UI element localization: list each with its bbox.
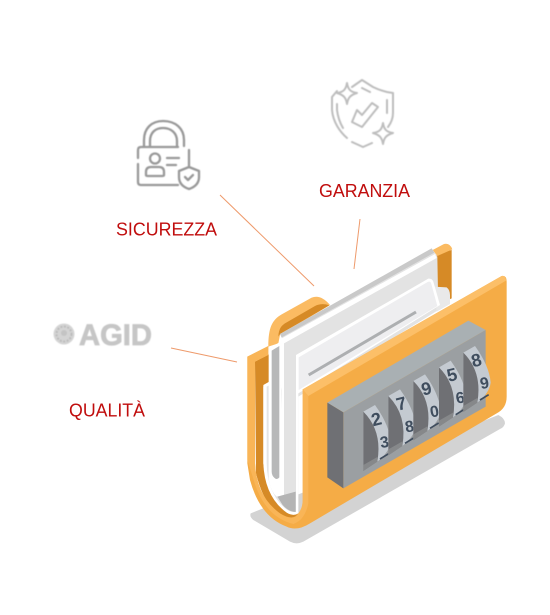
- icon: padlock with id card and shield: [138, 121, 199, 189]
- heading: GARANZIA: GARANZIA: [319, 180, 411, 201]
- lock top face: [327, 321, 486, 412]
- dial: 2 3: [363, 405, 391, 471]
- paper: sheet behind right: [433, 287, 450, 312]
- dial: 7 8: 7: [394, 393, 409, 415]
- arrow: sicurezza leader line: [220, 195, 314, 286]
- heading: QUALITÀ: QUALITÀ: [69, 400, 146, 420]
- dial: 5 6: 6: [454, 389, 466, 408]
- folder shadow: [250, 415, 505, 543]
- dial: 8 9: 8: [469, 349, 484, 371]
- arrow: garanzia leader line: [354, 219, 360, 269]
- folder front panel: [247, 276, 507, 529]
- dial: 7 8: 8: [404, 418, 416, 436]
- dial: 5 6: [439, 361, 466, 427]
- paper fold shadow: [277, 492, 296, 512]
- paper: rear sheet: [280, 248, 438, 497]
- folder back flap right: [437, 250, 452, 305]
- dial: 5 6: 5: [445, 364, 459, 386]
- dial: 8 9: 9: [479, 375, 491, 393]
- dial: 2 3: 3: [379, 434, 391, 452]
- icon: shield with check and sparkles: [332, 80, 393, 147]
- paper: front sheet: [277, 279, 440, 513]
- folder illustration: [247, 244, 507, 543]
- arrow: qualita leader line: [171, 348, 237, 362]
- dial: 2 3: 2: [369, 408, 384, 430]
- combination lock: [327, 321, 491, 488]
- heading: SICUREZZA: SICUREZZA: [116, 218, 218, 240]
- dial: 9 0: 0: [429, 403, 441, 421]
- paper: outer sheet: [263, 380, 298, 515]
- lock front face: [343, 330, 486, 488]
- paper: inner sheet gray: [269, 342, 283, 497]
- icon: emblem: [54, 324, 74, 344]
- panel top highlight: [303, 276, 506, 396]
- dial: 8 9: [463, 346, 491, 412]
- dial: 9 0: [413, 374, 441, 440]
- text line on paper: [309, 312, 416, 375]
- dial: 7 8: [388, 389, 416, 455]
- logo: AGID: [54, 319, 152, 352]
- logo wordmark: AGID: [79, 319, 152, 352]
- folder inner left wall: [255, 354, 298, 521]
- dial: 9 0: 9: [419, 378, 434, 400]
- lock left face: [327, 403, 343, 488]
- folder back flap left: [268, 297, 330, 347]
- panel left highlight: [247, 346, 308, 524]
